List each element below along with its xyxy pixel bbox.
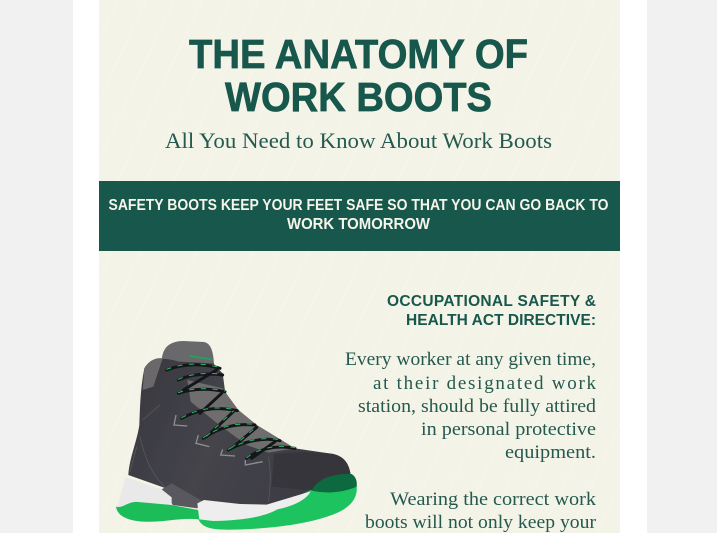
directive heading: OCCUPATIONAL SAFETY & xyxy=(387,293,596,310)
directive heading xyxy=(387,293,596,329)
banner xyxy=(99,181,620,251)
title: WORK BOOTS xyxy=(225,74,492,120)
green outsole rear xyxy=(116,502,199,522)
side panel xyxy=(143,358,163,390)
icon: work boot xyxy=(116,341,357,530)
boot upper xyxy=(128,359,351,505)
directive body text: Every worker at any given time, xyxy=(345,349,596,370)
green outsole front xyxy=(197,486,357,530)
boot collar xyxy=(162,341,214,372)
directive body text: boots will not only keep your xyxy=(365,512,597,533)
title xyxy=(189,31,528,120)
directive body text: Wearing the correct work xyxy=(390,489,597,510)
seams xyxy=(130,405,270,502)
banner: SAFETY BOOTS KEEP YOUR FEET SAFE SO THAT YOU CAN GO BACK TO xyxy=(108,197,608,214)
directive body text: station, should be fully attired xyxy=(358,396,597,417)
eyelets xyxy=(174,415,263,465)
panel: cream infographic background xyxy=(99,0,620,533)
directive body text: at their designated work xyxy=(373,373,596,394)
banner: WORK TOMORROW xyxy=(287,216,430,233)
title: THE ANATOMY OF xyxy=(189,31,528,77)
directive heading: HEALTH ACT DIRECTIVE: xyxy=(406,312,596,329)
green toe bumper xyxy=(312,474,357,492)
boot laces xyxy=(167,365,295,458)
toe cap xyxy=(272,452,351,491)
lace flecks xyxy=(167,364,295,458)
collar logo xyxy=(189,356,212,359)
white midsole front xyxy=(197,491,311,521)
heel shank xyxy=(162,483,202,508)
white midsole rear xyxy=(117,477,172,507)
subtitle: All You Need to Know About Work Boots xyxy=(165,128,552,153)
directive body text: in personal protective xyxy=(421,419,596,440)
tongue xyxy=(187,380,295,453)
directive body text xyxy=(345,349,597,533)
directive body text: equipment. xyxy=(505,442,596,463)
